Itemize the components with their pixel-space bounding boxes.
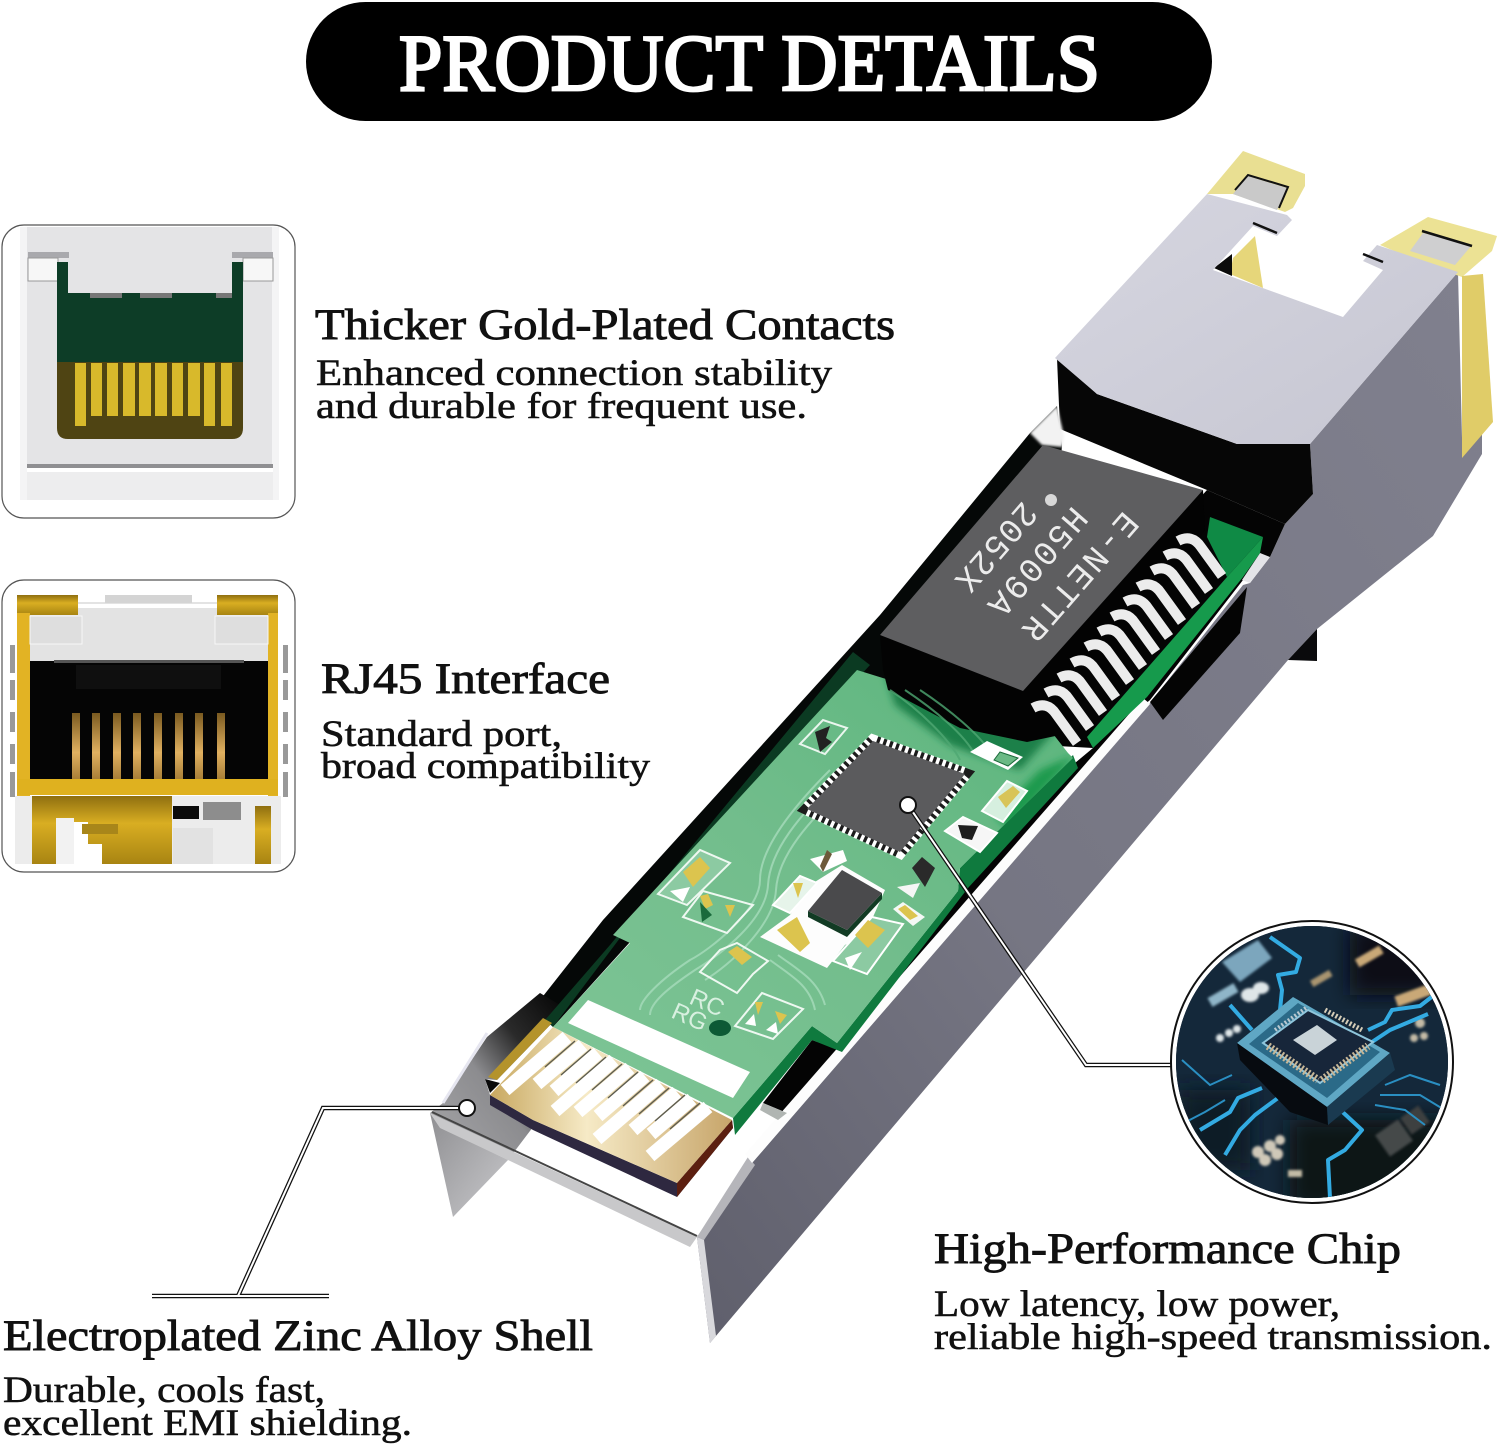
gold edge connector: [485, 1018, 733, 1197]
PCB right edge: [733, 755, 1078, 1135]
module illustration: [430, 151, 1497, 1343]
text: shell: Durable, cools fast,: [3, 1370, 325, 1411]
main QFP chip: [807, 741, 965, 852]
transformer green area: [1207, 517, 1263, 577]
transformer IC top with markings: E-NETTR: [1012, 503, 1144, 647]
title: PRODUCT DETAILS: [399, 20, 1100, 108]
text: RJ45 interface: [321, 656, 651, 787]
surface mount components: [658, 720, 1027, 1039]
PCB silkscreen white area: [568, 1000, 750, 1098]
right yellow side: [1462, 274, 1493, 458]
surface mount components: RC: [686, 984, 728, 1023]
callout line: shell: [152, 1100, 475, 1296]
wall highlight strip: [745, 698, 1150, 1163]
wall front bevel: [697, 1157, 755, 1240]
panel: gold contacts closeup: [2, 225, 295, 518]
text: gold contacts: and durable for frequent use.: [316, 386, 807, 427]
text: chip: reliable high-speed transmission.: [934, 1317, 1492, 1358]
top plate: [1055, 194, 1458, 444]
front left leg: [430, 1113, 508, 1217]
transformer green strip: [1087, 537, 1263, 748]
left wall pale edge: [443, 1033, 487, 1103]
black tab: [1288, 629, 1317, 661]
transformer IC top with markings: [880, 445, 1203, 691]
text: gold contacts: Enhanced connection stability: [316, 353, 833, 394]
text: chip: High-Performance Chip: [934, 1226, 1401, 1273]
rear yellow tip left: [1207, 151, 1305, 212]
PCB traces: [640, 690, 990, 1015]
left inner housing: [540, 406, 1062, 1027]
PCB top with shading: [553, 655, 1075, 1118]
left wall inner surface: [430, 993, 560, 1160]
gray front piece: [760, 1103, 787, 1120]
callout line: chip: [900, 797, 1172, 1065]
text: shell: excellent EMI shielding.: [3, 1403, 412, 1444]
circular chip photo: [1170, 920, 1460, 1210]
text: shell: [3, 1313, 593, 1444]
text: gold contacts: [315, 302, 895, 427]
transformer IC top with markings: H5009A: [978, 498, 1093, 623]
text: chip: Low latency, low power,: [934, 1284, 1340, 1325]
black tab under wall: [1150, 587, 1247, 720]
transformer pins: [1033, 538, 1222, 743]
black interior right of board: [763, 698, 1143, 1113]
rear yellow tip right: [1380, 217, 1497, 277]
text: shell: Electroplated Zinc Alloy Shell: [3, 1313, 593, 1360]
text: RJ45 interface: RJ45 Interface: [321, 656, 610, 703]
text: gold contacts: Thicker Gold-Plated Contacts: [315, 302, 895, 349]
black band under plate: [1057, 358, 1313, 524]
transformer IC top with markings: 2052X: [945, 493, 1043, 598]
right side body and wall: [697, 272, 1482, 1343]
text: RJ45 interface: Standard port,: [321, 714, 562, 755]
front strip: [430, 1112, 697, 1247]
upper wall highlight: [1242, 553, 1270, 583]
panel: RJ45 port closeup: [2, 580, 295, 872]
text: chip: [934, 1226, 1492, 1358]
black interior behind pins: [1023, 490, 1285, 748]
PCB left edge: [545, 652, 870, 1027]
rear metal left: [1233, 176, 1287, 210]
inner yellow: [1230, 236, 1263, 288]
transformer body: [880, 490, 1205, 742]
surface mount components: RG: [668, 998, 711, 1037]
title: [306, 2, 1212, 121]
wall front edge: [697, 1237, 716, 1343]
small chip with pads: [760, 865, 885, 968]
text: RJ45 interface: broad compatibility: [321, 746, 651, 787]
